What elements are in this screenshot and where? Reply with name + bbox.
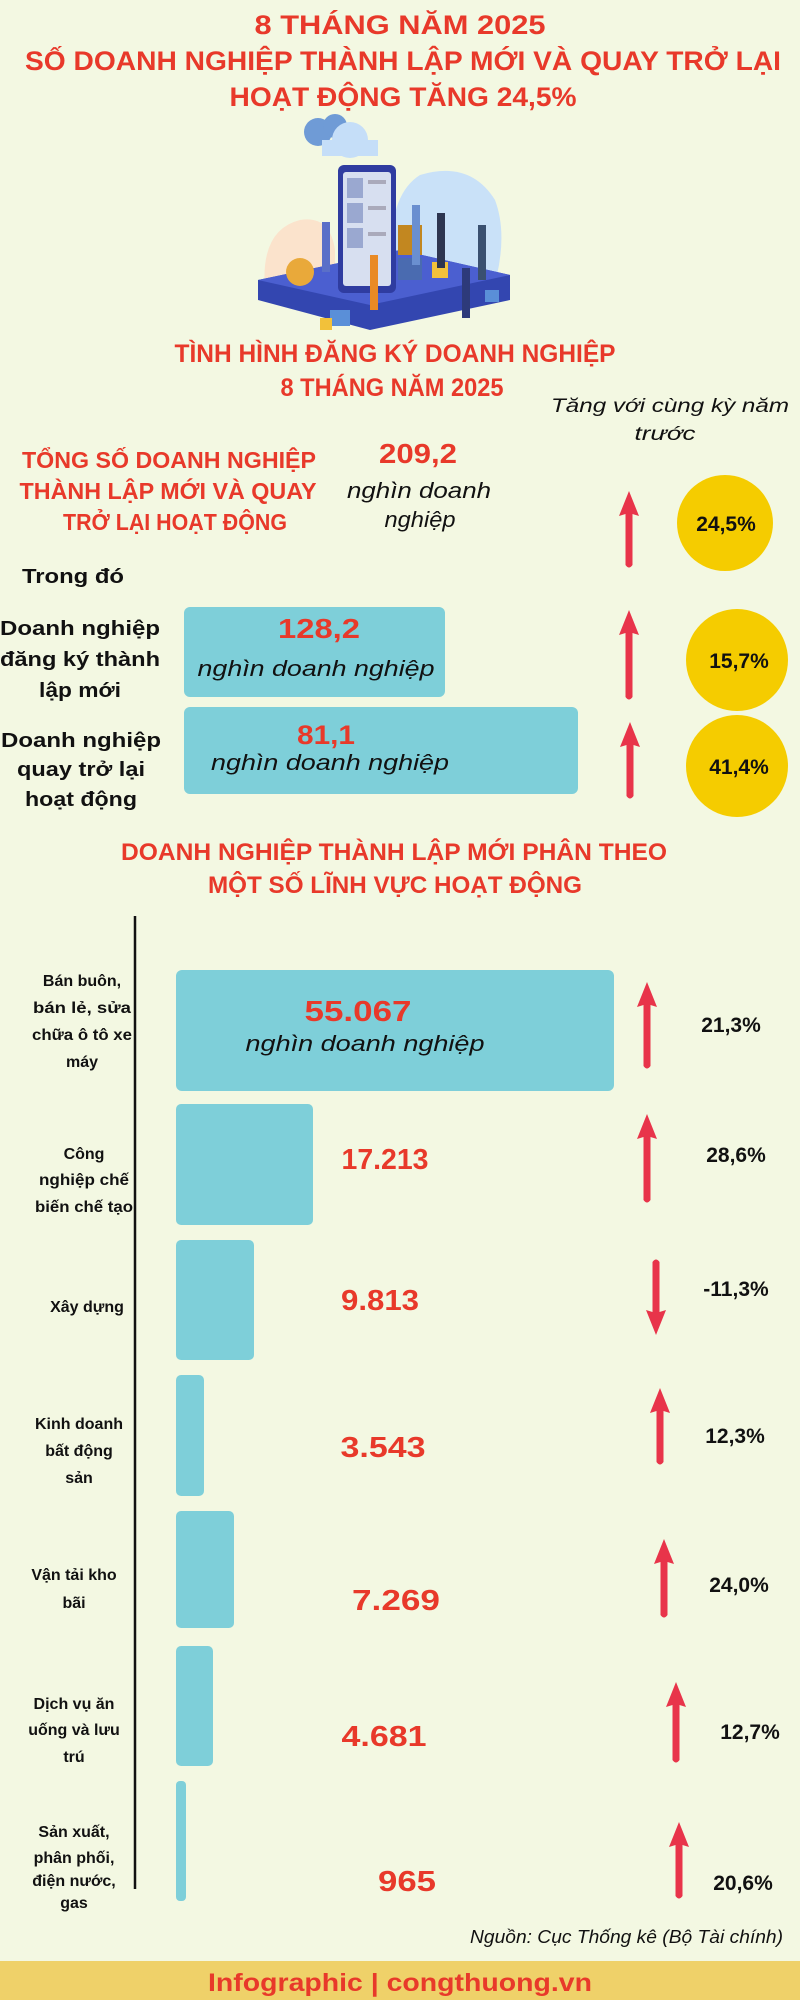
row: construction bbox=[50, 1240, 769, 1360]
total label: THÀNH LẬP MỚI VÀ QUAY bbox=[20, 477, 316, 504]
circle: 15,7%: 15,7% bbox=[709, 650, 769, 673]
row: manufacturing: biến chế tạo bbox=[35, 1199, 133, 1216]
total value: nghìn doanh bbox=[347, 478, 491, 503]
row: accommodation food: 12,7% bbox=[720, 1721, 780, 1744]
total value: 209,2 bbox=[379, 438, 457, 469]
row: utilities: điện nước, bbox=[32, 1873, 116, 1890]
row: manufacturing: Công bbox=[64, 1146, 104, 1163]
label: new businesses: Doanh nghiệp bbox=[0, 618, 160, 640]
row: transport storage: Vận tải kho bbox=[31, 1567, 117, 1584]
note: growth vs same period: trước bbox=[634, 424, 696, 445]
heading: registration status: TÌNH HÌNH ĐĂNG KÝ DOANH NGHIỆP bbox=[174, 338, 616, 368]
row: real estate: Kinh doanh bbox=[35, 1416, 123, 1433]
row: wholesale retail: nghìn doanh nghiệp bbox=[246, 1031, 484, 1056]
heading: registration status: 8 THÁNG NĂM 2025 bbox=[280, 373, 504, 402]
row: utilities: 20,6% bbox=[713, 1872, 773, 1895]
label: returning businesses bbox=[1, 730, 161, 811]
row: utilities: gas bbox=[60, 1895, 88, 1912]
row: transport storage: bãi bbox=[62, 1595, 86, 1612]
row: wholesale retail: Bán buôn, bbox=[43, 973, 121, 990]
row: real estate: bất động bbox=[45, 1443, 113, 1460]
row: construction: Xây dựng bbox=[50, 1299, 124, 1316]
row: accommodation food: trú bbox=[63, 1749, 85, 1766]
title bbox=[25, 9, 781, 112]
circle: 41,4% bbox=[686, 715, 788, 817]
circle: 41,4%: 41,4% bbox=[709, 756, 769, 779]
total label: TRỞ LẠI HOẠT ĐỘNG bbox=[63, 507, 287, 535]
label: new businesses: lập mới bbox=[39, 680, 121, 702]
source note: Nguồn: Cục Thống kê (Bộ Tài chính) bbox=[470, 1927, 783, 1947]
row: wholesale retail: 21,3% bbox=[701, 1014, 761, 1037]
row: wholesale retail: chữa ô tô xe bbox=[32, 1027, 132, 1044]
row: accommodation food: uống và lưu bbox=[28, 1722, 120, 1739]
heading: new businesses by sector bbox=[121, 838, 667, 899]
row: accommodation food: Dịch vụ ăn bbox=[34, 1696, 114, 1713]
row: accommodation food bbox=[28, 1646, 780, 1766]
row: real estate: 12,3% bbox=[705, 1425, 765, 1448]
row: accommodation food: 4.681 bbox=[342, 1721, 426, 1753]
bar: new businesses: 128,2 bbox=[278, 613, 360, 644]
arrow: new up bbox=[619, 610, 639, 700]
heading: registration status bbox=[174, 338, 616, 402]
sector bar chart bbox=[28, 916, 780, 1912]
row: real estate bbox=[35, 1375, 765, 1496]
row: construction: 9.813 bbox=[341, 1285, 419, 1317]
arrow: returning up bbox=[620, 722, 640, 798]
row: real estate: sản bbox=[65, 1470, 93, 1487]
row: transport storage: 7.269 bbox=[352, 1585, 440, 1617]
row: utilities: Sản xuất, bbox=[38, 1824, 110, 1841]
row: wholesale retail: máy bbox=[66, 1054, 98, 1071]
row: construction: -11,3% bbox=[703, 1278, 769, 1301]
heading: new businesses by sector: MỘT SỐ LĨNH VỰC HOẠT ĐỘNG bbox=[208, 871, 582, 899]
circle: 15,7% bbox=[686, 609, 788, 711]
title: HOẠT ĐỘNG TĂNG 24,5% bbox=[230, 81, 576, 112]
title: 8 THÁNG NĂM 2025 bbox=[254, 9, 546, 40]
heading: new businesses by sector: DOANH NGHIỆP THÀNH LẬP MỚI PHÂN THEO bbox=[121, 838, 667, 866]
row: manufacturing: nghiệp chế bbox=[39, 1172, 129, 1189]
row: manufacturing bbox=[35, 1104, 766, 1225]
row: wholesale retail bbox=[32, 970, 761, 1091]
label: new businesses bbox=[0, 618, 160, 702]
row: real estate: 3.543 bbox=[340, 1432, 426, 1464]
total label bbox=[20, 446, 316, 535]
label: new businesses: đăng ký thành bbox=[0, 649, 160, 671]
label: returning businesses: hoạt động bbox=[25, 789, 137, 811]
label: returning businesses: Doanh nghiệp bbox=[1, 730, 161, 752]
bar: new businesses: nghìn doanh nghiệp bbox=[198, 656, 434, 681]
row: utilities: phân phối, bbox=[34, 1850, 114, 1867]
bar: returning businesses bbox=[184, 707, 578, 794]
footer bar: Infographic | congthuong.vn bbox=[208, 1969, 592, 1997]
row: transport storage: 24,0% bbox=[709, 1574, 769, 1597]
text: Trong đó: Trong đó bbox=[22, 566, 124, 588]
total label: TỔNG SỐ DOANH NGHIỆP bbox=[22, 446, 316, 473]
row: wholesale retail: bán lẻ, sửa bbox=[33, 1000, 131, 1017]
note: growth vs same period bbox=[551, 396, 789, 445]
total value: nghiệp bbox=[384, 507, 456, 532]
row: utilities: 965 bbox=[378, 1866, 436, 1898]
bar: returning businesses: 81,1 bbox=[297, 720, 355, 750]
note: growth vs same period: Tăng với cùng kỳ năm bbox=[551, 396, 789, 417]
circle: 24,5%: 24,5% bbox=[696, 513, 756, 536]
label: returning businesses: quay trở lại bbox=[17, 759, 145, 781]
circle: 24,5% bbox=[677, 475, 773, 571]
row: transport storage bbox=[31, 1511, 769, 1628]
row: utilities bbox=[32, 1781, 773, 1912]
bar: returning businesses: nghìn doanh nghiệp bbox=[211, 750, 449, 775]
row: manufacturing: 17.213 bbox=[342, 1144, 428, 1176]
row: manufacturing: 28,6% bbox=[706, 1144, 766, 1167]
title: SỐ DOANH NGHIỆP THÀNH LẬP MỚI VÀ QUAY TRỞ LẠI bbox=[25, 44, 781, 76]
illustration: business platform bbox=[258, 114, 510, 330]
total value bbox=[347, 438, 491, 532]
footer bar bbox=[0, 1961, 800, 2000]
bar: new businesses bbox=[184, 607, 445, 697]
arrow: total up bbox=[619, 491, 639, 568]
row: wholesale retail: 55.067 bbox=[304, 996, 412, 1028]
